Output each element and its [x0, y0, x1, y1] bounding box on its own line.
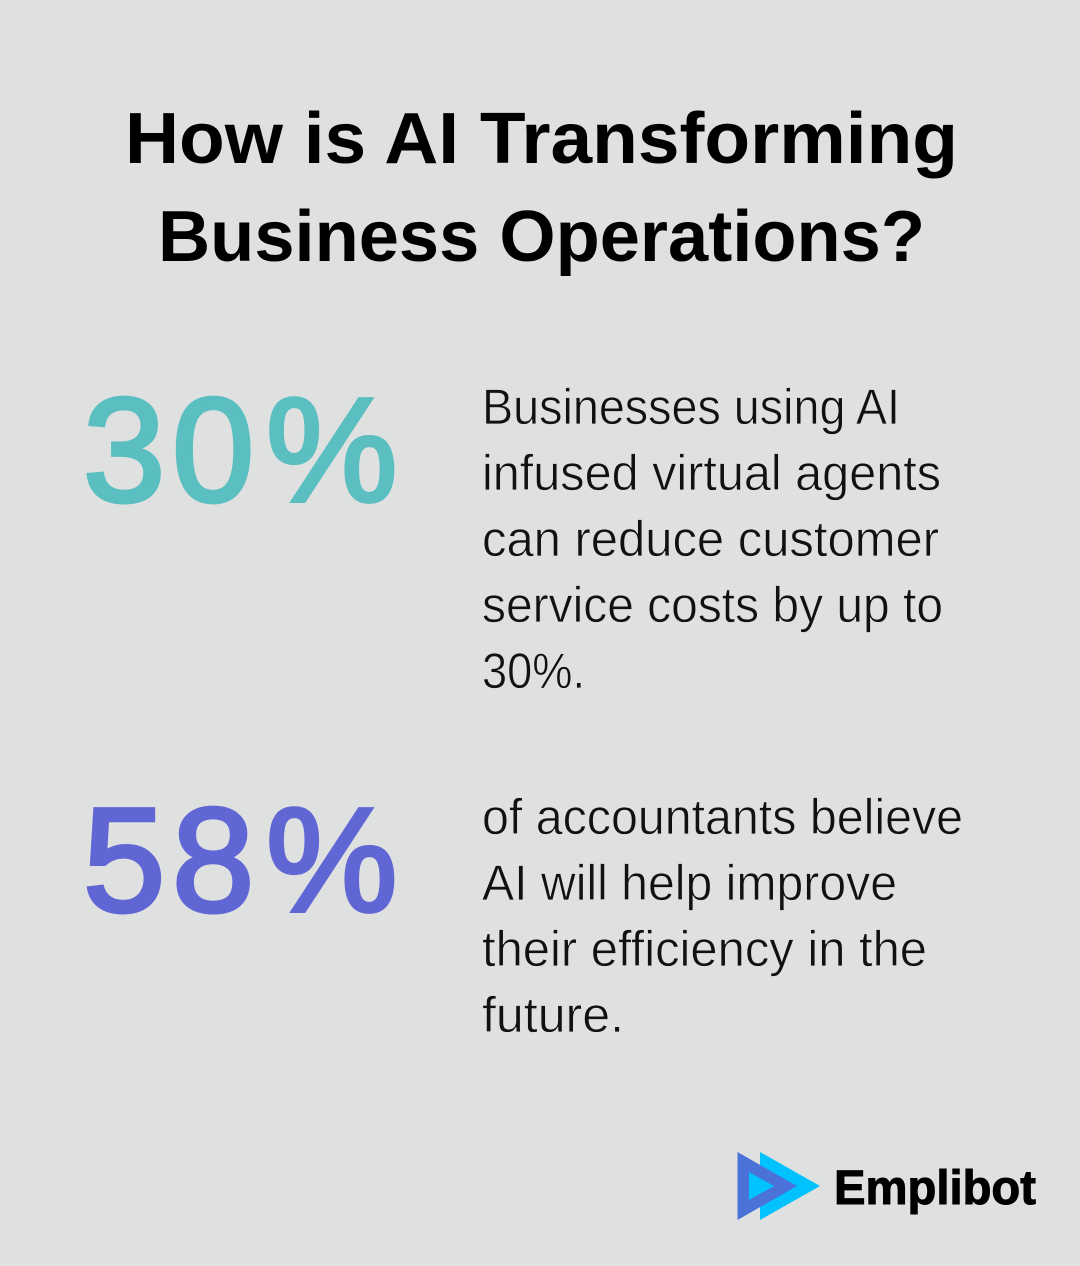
icon: play triangles — [738, 1152, 820, 1220]
title: How is AI Transforming — [125, 99, 958, 179]
text block: accountants efficiency — [482, 789, 963, 1043]
text block: customer service costs — [482, 379, 943, 699]
text block: accountants efficiency: future. — [482, 987, 624, 1043]
text block: customer service costs: 30%. — [482, 643, 585, 699]
text block: customer service costs: service costs by up to — [482, 577, 943, 633]
text block: accountants efficiency: AI will help improve — [482, 855, 897, 911]
logo: Emplibot: Emplibot — [834, 1162, 1036, 1215]
statistic: 30%: 30% — [83, 368, 398, 533]
logo: Emplibot — [738, 1152, 1036, 1220]
statistic: 58%: 58% — [83, 778, 398, 943]
title: Business Operations? — [158, 197, 925, 277]
title — [125, 99, 958, 277]
text block: accountants efficiency: of accountants believe — [482, 789, 963, 845]
text block: customer service costs: Businesses using AI — [482, 379, 900, 435]
text block: customer service costs: can reduce customer — [482, 511, 939, 567]
text block: customer service costs: infused virtual agents — [482, 445, 941, 501]
text block: accountants efficiency: their efficiency in the — [482, 921, 927, 977]
